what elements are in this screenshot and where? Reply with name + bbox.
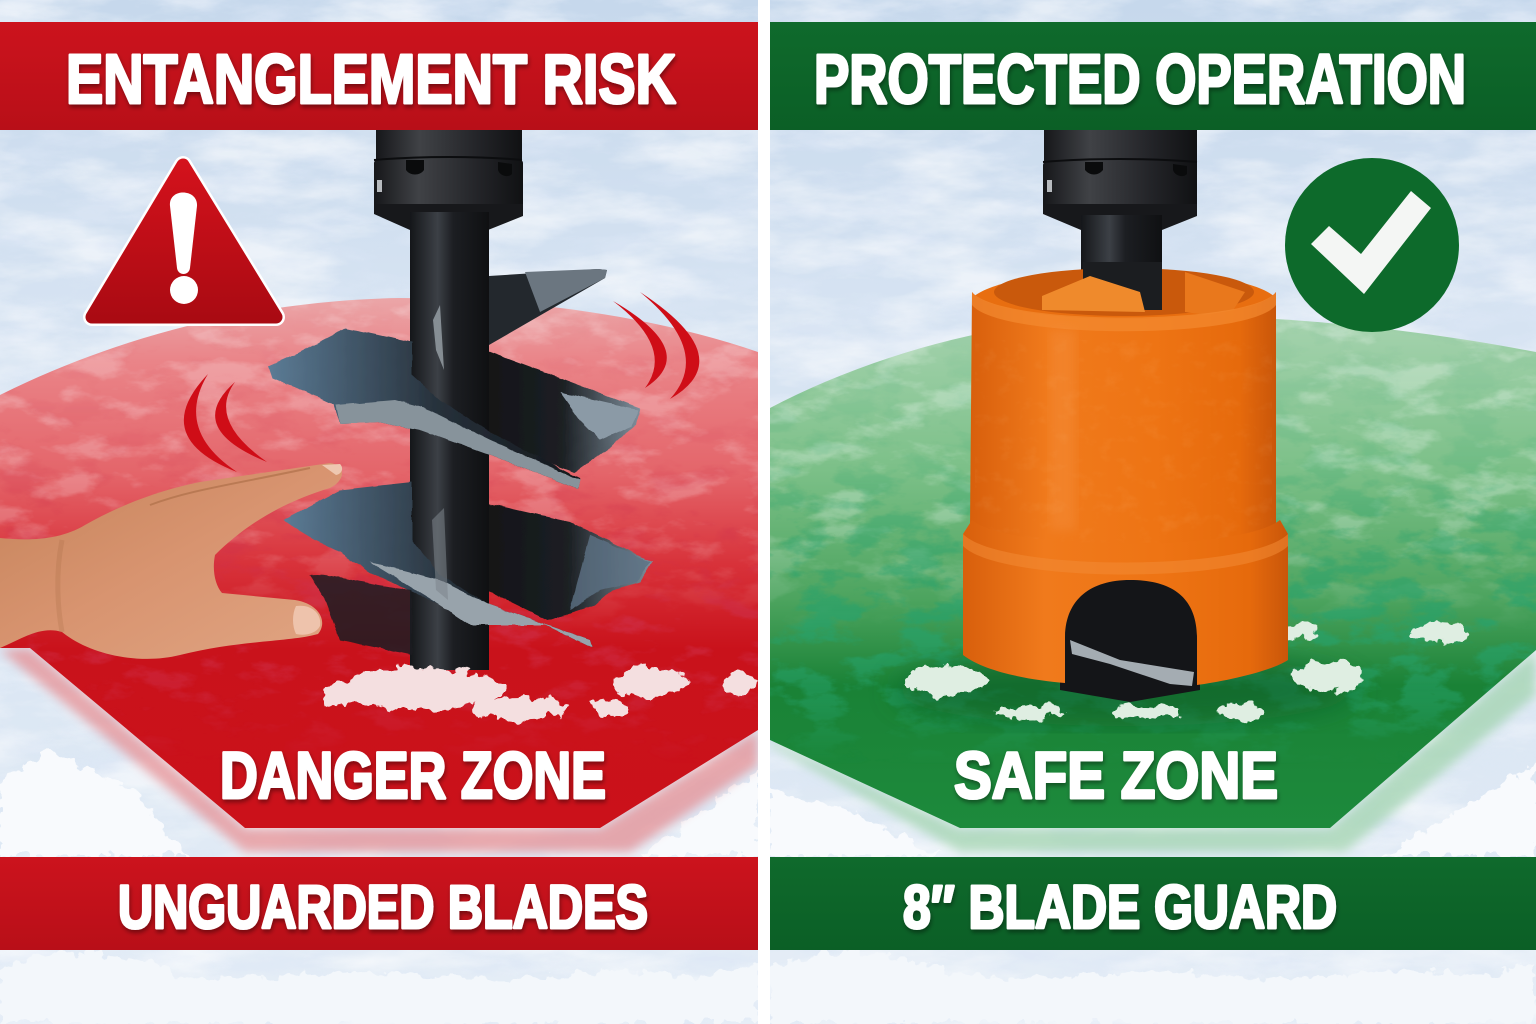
snow background right xyxy=(770,0,1536,1024)
lower blade left xyxy=(283,482,592,648)
label: danger zone: DANGER ZONE xyxy=(220,738,606,812)
icon: warning triangle xyxy=(92,165,276,317)
guard body xyxy=(970,292,1276,552)
bottom bar: 8 inch blade guard: 8″ BLADE GUARD xyxy=(903,873,1337,941)
bottom bar: 8 inch blade guard xyxy=(770,857,1536,950)
label: safe zone: SAFE ZONE xyxy=(954,738,1278,812)
blade guard xyxy=(963,262,1288,702)
shaft xyxy=(410,212,489,670)
icon: vibration arcs right xyxy=(613,292,699,399)
danger zone xyxy=(0,298,758,852)
auger drill xyxy=(268,130,652,670)
safe zone xyxy=(770,300,1536,852)
bottom bar: unguarded blades xyxy=(0,857,758,950)
icon: vibration arcs left xyxy=(184,374,267,472)
panel: protected operation xyxy=(770,0,1536,1024)
heading bar: entanglement risk: ENTANGLEMENT RISK xyxy=(66,40,676,118)
bottom bar: unguarded blades: UNGUARDED BLADES xyxy=(118,873,648,941)
lower blade right xyxy=(486,503,652,620)
guard interior xyxy=(975,283,1273,319)
heading bar: entanglement risk xyxy=(0,22,758,130)
icon: check badge xyxy=(1285,158,1459,332)
snow ring xyxy=(903,620,1468,720)
guard skirt xyxy=(963,520,1288,685)
snow background left xyxy=(0,0,758,1024)
upper blade back xyxy=(489,269,607,345)
middle blade right xyxy=(486,350,640,472)
snow pile xyxy=(321,667,756,719)
guard opening xyxy=(1060,575,1200,702)
hand xyxy=(0,463,342,659)
upper blade left xyxy=(268,328,580,489)
motor collar xyxy=(374,130,523,230)
lower hidden blade xyxy=(310,575,412,655)
heading bar: protected operation xyxy=(770,22,1536,130)
panel: entanglement risk xyxy=(0,0,758,1024)
auger drill behind guard xyxy=(1042,130,1198,270)
